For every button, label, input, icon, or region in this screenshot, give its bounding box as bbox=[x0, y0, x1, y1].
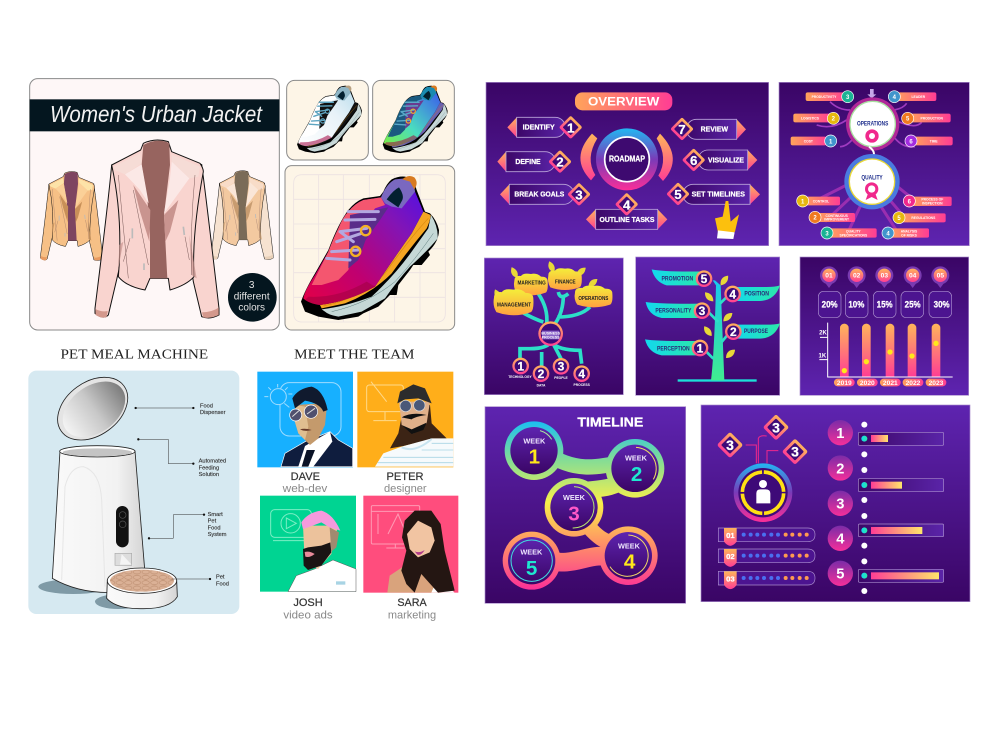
panel: timeline bbox=[485, 407, 686, 603]
title: timeline: TIMELINE bbox=[577, 416, 643, 430]
jacket: orange bbox=[40, 172, 102, 260]
shadows bbox=[38, 579, 108, 594]
roadmap ring bbox=[580, 128, 673, 190]
week 3 bbox=[550, 484, 598, 531]
label: personality bbox=[646, 302, 710, 319]
badge: 3 different colors: colors bbox=[238, 303, 265, 314]
pins: 04 bbox=[909, 273, 917, 280]
card: Sara bbox=[363, 496, 458, 622]
week 3: 3 bbox=[568, 502, 580, 525]
rating row 01: 01 bbox=[726, 531, 735, 540]
role: marketing: marketing bbox=[388, 610, 436, 622]
step 1: identify: IDENTIFY bbox=[523, 122, 555, 131]
label: perception: 1 bbox=[697, 341, 704, 355]
label: purpose bbox=[725, 323, 780, 340]
label: position: 4 bbox=[729, 287, 736, 301]
panel: overview roadmap bbox=[486, 82, 769, 246]
label: personality: 3 bbox=[699, 304, 706, 318]
name: Sara: SARA bbox=[397, 597, 427, 609]
step 3: break goals: BREAK GOALS bbox=[514, 190, 564, 199]
callout labels: Food bbox=[208, 525, 221, 531]
step 3: break goals bbox=[500, 183, 591, 206]
step 2: define bbox=[497, 150, 572, 173]
name: Peter: PETER bbox=[386, 471, 424, 483]
quality branches: QUALITY bbox=[846, 229, 861, 233]
step 5: set timelines bbox=[666, 182, 760, 206]
operations branches bbox=[791, 91, 953, 147]
percentage values: 10% bbox=[848, 299, 865, 309]
panel: white sneaker bbox=[287, 80, 368, 160]
callout labels: Food bbox=[200, 403, 213, 409]
week 4: 4 bbox=[624, 550, 636, 573]
step 1: identify: 1 bbox=[567, 120, 575, 135]
numbered circles: 2 bbox=[836, 461, 844, 477]
week 1 bbox=[510, 427, 558, 474]
percentage values: 15% bbox=[877, 299, 893, 309]
panel: blue-green sneaker bbox=[373, 80, 454, 160]
week 2 bbox=[611, 445, 659, 492]
year pills: 2020 bbox=[860, 380, 875, 387]
operations branches: 1 bbox=[829, 139, 833, 145]
pins bbox=[820, 266, 949, 288]
label: purpose: 2 bbox=[730, 325, 737, 339]
leaves bbox=[492, 260, 599, 301]
label: purpose: PURPOSE bbox=[744, 329, 768, 335]
bars bbox=[840, 324, 940, 377]
bar markers bbox=[842, 341, 939, 373]
label: promotion: PROMOTION bbox=[661, 276, 693, 282]
week 4 bbox=[605, 532, 652, 579]
label: personality: PERSONALITY bbox=[655, 308, 691, 314]
step 5: set timelines: 5 bbox=[674, 187, 682, 202]
node 3: people: 3 bbox=[558, 360, 565, 374]
pins: 03 bbox=[881, 273, 888, 280]
numbered circles: 4 bbox=[836, 532, 845, 548]
diamonds: 3 bbox=[726, 437, 734, 453]
week 3: WEEK bbox=[563, 493, 586, 502]
step 1: identify bbox=[507, 116, 582, 139]
callout labels: Solution bbox=[199, 472, 219, 478]
node 4: process: 4 bbox=[578, 367, 585, 381]
white timeline dots bbox=[861, 422, 867, 594]
numbered circles: 5 bbox=[836, 567, 844, 583]
axis labels: 1K bbox=[819, 353, 827, 359]
rating row 01 bbox=[718, 528, 815, 546]
axis labels bbox=[819, 330, 827, 359]
numbered circles: 1 bbox=[836, 426, 844, 442]
year pills: 2022 bbox=[906, 380, 921, 387]
percentage boxes bbox=[818, 291, 952, 318]
panel: women's urban jacket bbox=[30, 79, 279, 330]
panel: business process tree bbox=[484, 258, 623, 395]
rating row 03 bbox=[718, 571, 815, 589]
operations branches: TIME bbox=[930, 139, 938, 143]
week 5: WEEK bbox=[520, 548, 543, 557]
icon: dispenser body bbox=[52, 446, 145, 592]
progress bars bbox=[858, 432, 944, 582]
roadmap ring: ROADMAP bbox=[609, 155, 646, 164]
step 4: outline tasks: OUTLINE TASKS bbox=[599, 215, 654, 224]
role: web-dev: web-dev bbox=[282, 483, 328, 495]
step 4: outline tasks: 4 bbox=[623, 197, 631, 212]
hub: business process: PROCESS bbox=[542, 335, 560, 339]
title: overview bbox=[575, 92, 672, 110]
percentage values: 20% bbox=[822, 299, 838, 309]
operations branches: 6 bbox=[909, 139, 913, 145]
quality branches: 3 bbox=[825, 231, 829, 237]
week 1: WEEK bbox=[523, 436, 546, 445]
title: overview: OVERVIEW bbox=[588, 95, 660, 109]
week 2: 2 bbox=[631, 463, 642, 486]
rating row 02: 02 bbox=[726, 552, 735, 561]
year pills bbox=[834, 379, 946, 387]
hub: quality bbox=[844, 154, 900, 209]
connected ring shape bbox=[503, 421, 664, 590]
pins: 01 bbox=[825, 273, 833, 280]
diamonds bbox=[717, 414, 808, 465]
hub: operations bbox=[846, 97, 899, 151]
person ring bbox=[734, 463, 792, 522]
operations branches: 5 bbox=[906, 117, 910, 123]
step 6: visualize: VISUALIZE bbox=[708, 156, 744, 165]
callout labels: Feeding bbox=[199, 465, 219, 471]
label: perception bbox=[645, 339, 708, 356]
step 3: break goals: 3 bbox=[575, 187, 583, 202]
week 2: WEEK bbox=[625, 454, 648, 463]
name: Dave: DAVE bbox=[291, 471, 320, 483]
icon: open lid bbox=[46, 364, 140, 453]
label: perception: PERCEPTION bbox=[657, 346, 690, 352]
node 4: process bbox=[573, 365, 591, 387]
week 1: 1 bbox=[529, 446, 540, 469]
title banner bbox=[30, 99, 279, 131]
name: Josh: JOSH bbox=[293, 597, 323, 609]
step 7: review: 7 bbox=[678, 122, 686, 137]
heading: pet meal machine: PET MEAL MACHINE bbox=[60, 346, 208, 361]
label: promotion: 5 bbox=[701, 272, 708, 286]
role: designer: designer bbox=[384, 483, 427, 495]
step 2: define: DEFINE bbox=[515, 157, 541, 166]
link between hubs bbox=[868, 147, 875, 172]
callout labels: Pet bbox=[216, 574, 225, 580]
badge: 3 different colors: different bbox=[234, 291, 270, 302]
badge: 3 different colors bbox=[228, 273, 277, 322]
arrow: down bbox=[867, 89, 876, 98]
heading: meet the team: MEET THE TEAM bbox=[294, 346, 414, 361]
step 5: set timelines: SET TIMELINES bbox=[692, 190, 745, 199]
card: Peter bbox=[357, 372, 453, 495]
rating row 03: 03 bbox=[726, 574, 735, 583]
step 4: outline tasks bbox=[586, 193, 667, 229]
quality branches: CONTINUOUS bbox=[825, 214, 849, 218]
card: Josh bbox=[260, 496, 356, 622]
hub: operations: OPERATIONS bbox=[857, 122, 888, 128]
week 4: WEEK bbox=[618, 541, 641, 550]
operations branches: PRODUCTION bbox=[920, 116, 943, 120]
pins: 05 bbox=[937, 273, 944, 280]
operations branches: LEADER bbox=[911, 95, 926, 99]
cloud: management: MANAGEMENT bbox=[497, 302, 532, 308]
quality branches: 5 bbox=[897, 216, 901, 222]
quality branches: REGULATIONS bbox=[911, 216, 936, 220]
axis labels: 2K bbox=[819, 330, 827, 336]
jacket: cream bbox=[211, 171, 273, 260]
node 2: data: 2 bbox=[538, 367, 545, 381]
step 2: define: 2 bbox=[556, 155, 564, 170]
jacket: pink bbox=[95, 140, 219, 318]
arrows from person bbox=[746, 436, 778, 463]
quality branches: CONTROL bbox=[813, 199, 829, 203]
branches bbox=[520, 292, 590, 367]
cloud: finance: FINANCE bbox=[555, 279, 576, 285]
step 7: review: REVIEW bbox=[701, 125, 729, 134]
week 5 bbox=[508, 537, 555, 584]
leaves bbox=[701, 274, 736, 360]
operations branches: 4 bbox=[893, 95, 897, 101]
trunk bbox=[678, 280, 757, 382]
cloud: marketing: MARKETING bbox=[517, 280, 546, 286]
percentage values: 30% bbox=[934, 299, 950, 309]
role: video ads: video ads bbox=[283, 610, 333, 622]
callout labels: System bbox=[208, 532, 227, 538]
card: Dave bbox=[257, 372, 353, 495]
year pills: 2023 bbox=[929, 380, 944, 387]
pins: 02 bbox=[853, 273, 861, 280]
panel: yearly bar chart bbox=[800, 257, 969, 395]
hub: business process: BUSINESS bbox=[541, 331, 561, 335]
hub: quality: QUALITY bbox=[861, 176, 883, 182]
node 3: people: PEOPLE bbox=[554, 376, 569, 380]
icon: food bowl bbox=[95, 568, 177, 609]
rating row 02 bbox=[718, 549, 815, 567]
section: tree diagrams bbox=[484, 257, 780, 395]
panel: pet meal machine bbox=[28, 364, 239, 614]
node 1: technology: TECHNOLOGY bbox=[508, 375, 533, 379]
callout labels bbox=[199, 403, 229, 588]
quality branches: 6 bbox=[908, 199, 912, 205]
numbered circles bbox=[828, 420, 853, 586]
label: position bbox=[724, 285, 780, 302]
diamonds: 3 bbox=[791, 444, 799, 460]
callout labels: Pet bbox=[208, 519, 217, 525]
diamonds: 3 bbox=[772, 419, 780, 435]
connecting roots bbox=[815, 102, 922, 235]
quality branches: PROCESS OF bbox=[921, 198, 943, 202]
label: position: POSITION bbox=[744, 292, 769, 298]
node 1: technology: 1 bbox=[517, 359, 524, 373]
quality branches: OF RISKS bbox=[901, 233, 918, 237]
operations branches: 3 bbox=[846, 95, 850, 101]
section: pet machine and team bbox=[28, 346, 458, 622]
node 3: people bbox=[553, 358, 569, 380]
hub: business process bbox=[538, 321, 563, 346]
percentage values: 25% bbox=[905, 299, 921, 309]
quality branches: 2 bbox=[813, 216, 817, 222]
quality branches: 4 bbox=[886, 231, 890, 237]
title: Women's Urban Jacket bbox=[50, 101, 264, 127]
panel: operations and quality bbox=[779, 82, 969, 246]
quality branches: 1 bbox=[801, 199, 805, 205]
axes bbox=[819, 323, 953, 377]
callout labels: Smart bbox=[208, 512, 223, 518]
icon: pointing hand bbox=[715, 201, 739, 239]
callout labels: Automated bbox=[199, 459, 226, 465]
callout labels: Food bbox=[216, 582, 229, 588]
label: promotion bbox=[652, 269, 712, 287]
week 5: 5 bbox=[526, 557, 537, 580]
operations branches: COST bbox=[804, 139, 813, 143]
badge: 3 different colors: 3 bbox=[249, 280, 255, 291]
node 2: data: DATA bbox=[537, 383, 546, 387]
quality branches bbox=[797, 195, 952, 239]
node 2: data bbox=[533, 365, 549, 387]
panel: marketing tree bbox=[636, 257, 780, 395]
operations branches: PRODUCTIVITY bbox=[812, 95, 837, 99]
callout labels: Dispenser bbox=[200, 410, 226, 416]
numbered circles: 3 bbox=[836, 497, 844, 513]
quality branches: ANALYSIS bbox=[901, 229, 918, 233]
year pills: 2021 bbox=[883, 380, 898, 387]
callout lines bbox=[134, 407, 211, 580]
node 1: technology bbox=[508, 358, 533, 379]
year pills: 2019 bbox=[837, 380, 852, 387]
panel: progress dashboard bbox=[701, 405, 970, 602]
quality branches: IMPROVEMENT bbox=[824, 218, 849, 222]
node 4: process: PROCESS bbox=[574, 383, 591, 387]
operations branches: 2 bbox=[832, 117, 836, 123]
percentage values bbox=[822, 299, 950, 309]
step 7: review bbox=[670, 117, 746, 141]
quality branches: INSPECTION bbox=[922, 202, 943, 206]
panel: large gradient sneaker bbox=[285, 166, 455, 330]
cloud: operations: OPERATIONS bbox=[578, 296, 609, 302]
section: jacket and sneaker product cards bbox=[30, 79, 455, 330]
quality branches: SPECIFICATIONS bbox=[839, 233, 868, 237]
step 6: visualize bbox=[682, 148, 757, 172]
operations branches: LOGISTICS bbox=[801, 116, 820, 120]
step 6: visualize: 6 bbox=[690, 153, 697, 168]
